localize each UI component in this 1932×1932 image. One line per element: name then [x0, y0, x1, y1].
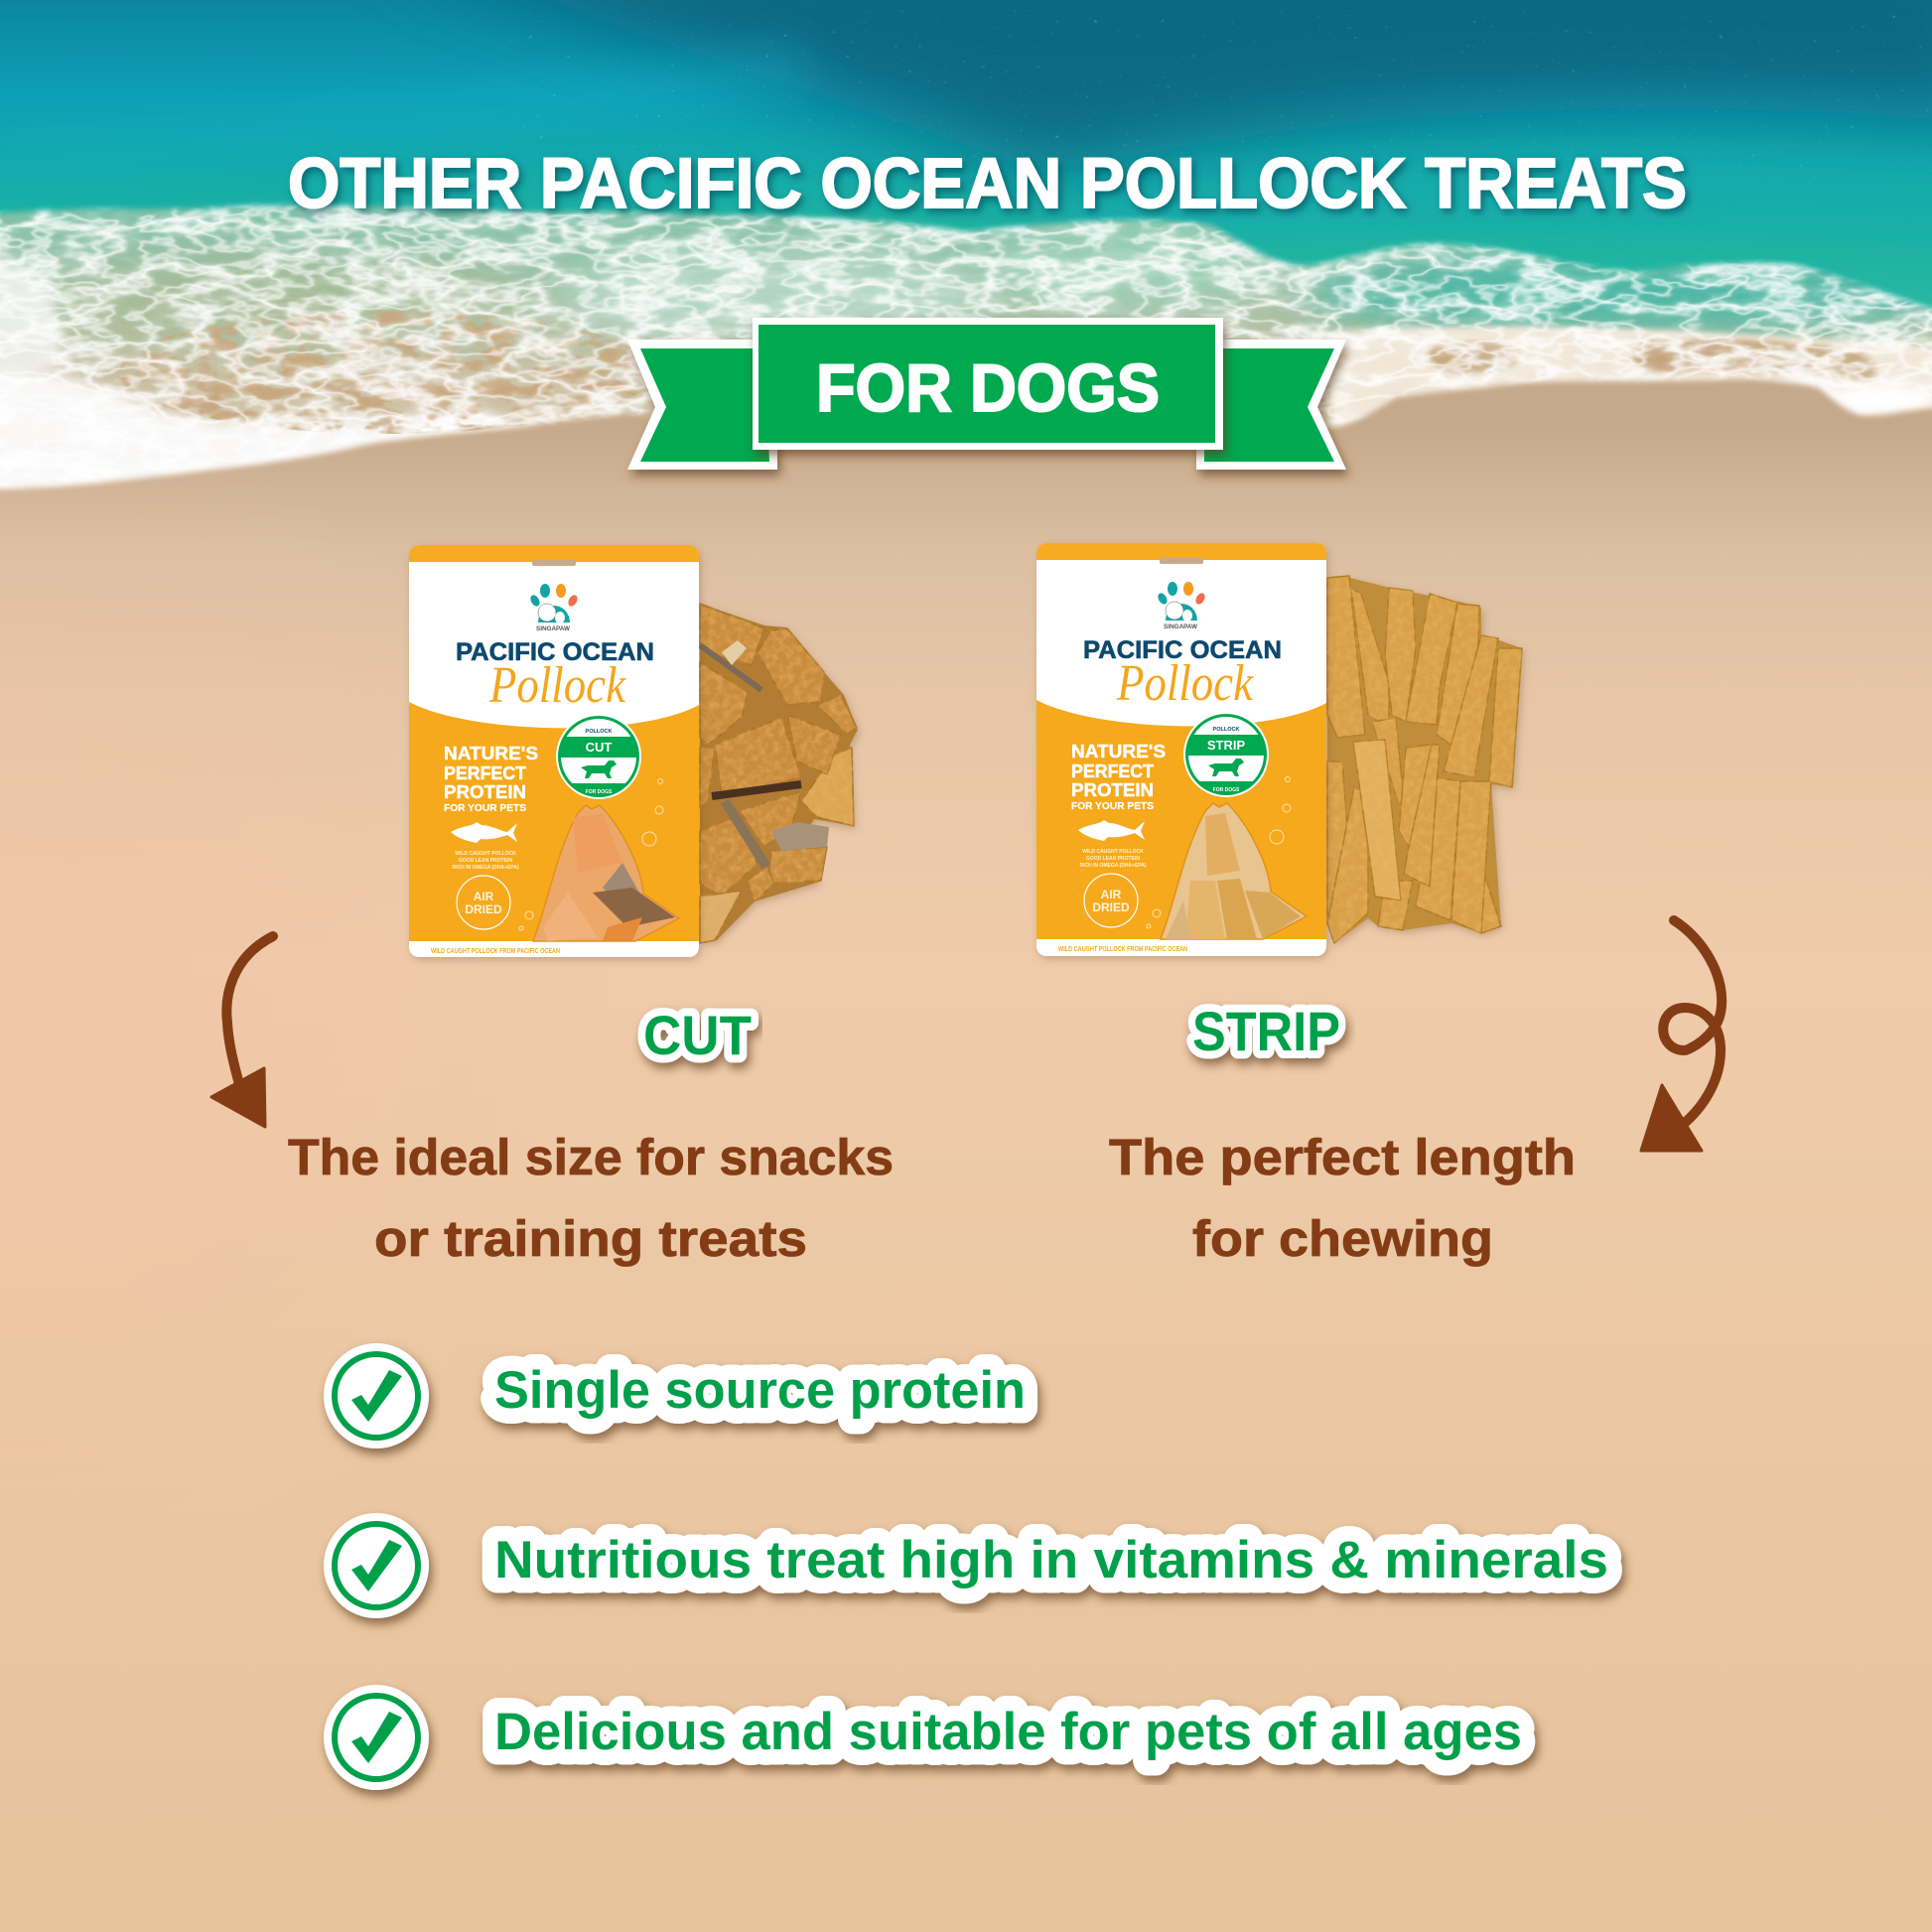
product pouch: strip: [1036, 543, 1326, 956]
description: strip: The perfect length: [1109, 1129, 1576, 1185]
ribbon centre panel: [753, 318, 1223, 450]
ribbon right tail: [1196, 340, 1346, 470]
product badge: strip: STRIP: [1207, 738, 1245, 753]
pouch footer: WILD CAUGHT POLLOCK FROM PACIFIC OCEAN: [431, 948, 560, 955]
ribbon banner: for dogs: [627, 318, 1346, 470]
fish icon: [1078, 820, 1145, 841]
product badge: cut: POLLOCK: [586, 729, 612, 735]
air dried stamp: [457, 876, 510, 929]
pouch claim: PERFECT: [1071, 761, 1154, 781]
bubbles: [519, 778, 663, 930]
pouch benefits: RICH IN OMEGA (DHA+EPA): [1079, 863, 1147, 869]
description: strip: for chewing: [1192, 1210, 1493, 1267]
pouch name: PACIFIC OCEAN: [456, 638, 654, 666]
description: strip: [1109, 1129, 1576, 1267]
product badge: strip: [1183, 712, 1269, 797]
air dried stamp: AIR: [1101, 888, 1122, 901]
fish window with treats: [1161, 803, 1307, 939]
fish icon: [451, 822, 517, 843]
arrow: looped, to strip description: [1641, 920, 1722, 1151]
pouch footer: WILD CAUGHT POLLOCK FROM PACIFIC OCEAN: [1058, 946, 1187, 953]
pouch script word: Pollock: [1116, 655, 1254, 712]
description: cut: The ideal size for snacks: [288, 1129, 894, 1185]
ribbon left tail: [627, 340, 777, 470]
air dried stamp: DRIED: [1092, 900, 1130, 914]
description: cut: [288, 1129, 894, 1267]
ribbon label: FOR DOGS: [816, 350, 1160, 426]
air dried stamp: AIR: [474, 890, 494, 903]
arrow: curved, to cut description: [211, 936, 273, 1127]
product badge: cut: [556, 714, 641, 799]
pouch claim: NATURE'S: [444, 744, 538, 763]
brand logo: SINGAPAW: [1164, 624, 1197, 630]
air dried stamp: DRIED: [465, 902, 502, 916]
pouch benefits: WILD CAUGHT POLLOCK: [1082, 849, 1144, 855]
product badge: strip: POLLOCK: [1213, 727, 1239, 733]
product badge: cut: FOR DOGS: [586, 789, 613, 795]
pouch benefits: [452, 851, 519, 871]
pouch claim: PROTEIN: [444, 782, 526, 802]
title: OTHER PACIFIC OCEAN POLLOCK TREATS: [288, 145, 1687, 223]
benefit text: Nutritious treat high in vitamins & minerals: [494, 1531, 1608, 1589]
label: strip: STRIP: [1192, 1000, 1340, 1062]
pouch claim: FOR YOUR PETS: [444, 803, 526, 814]
treat pile: cut pieces: [700, 604, 858, 943]
icon: check badge: [324, 1685, 429, 1790]
pouch claim: PROTEIN: [1071, 780, 1154, 800]
benefit text: Single source protein: [494, 1361, 1026, 1420]
benefit 1: single source protein: [324, 1343, 1026, 1449]
brand logo: [529, 584, 579, 632]
pouch claim: NATURE'S: [1071, 742, 1166, 761]
brand logo: [1157, 582, 1206, 630]
product badge: cut: CUT: [586, 740, 612, 755]
pouch script word: Pollock: [488, 657, 626, 714]
pouch benefits: GOOD LEAN PROTEIN: [459, 858, 512, 864]
icon: check badge: [324, 1343, 429, 1449]
fish window with treats: [533, 805, 679, 941]
pouch claim: [444, 744, 538, 814]
product pouch: cut: [409, 545, 699, 957]
benefit text: Delicious and suitable for pets of all ages: [494, 1703, 1522, 1761]
pouch name: PACIFIC OCEAN: [1083, 636, 1282, 664]
label: cut: CUT: [643, 1004, 752, 1066]
pouch claim: PERFECT: [444, 763, 526, 783]
icon: check badge: [324, 1513, 429, 1618]
pouch benefits: [1079, 849, 1147, 869]
benefit 3: delicious for all ages: [324, 1685, 1522, 1790]
pouch benefits: GOOD LEAN PROTEIN: [1086, 856, 1140, 862]
bubbles: [1147, 776, 1291, 928]
pouch claim: FOR YOUR PETS: [1071, 801, 1154, 812]
benefit 2: nutritious treat: [324, 1513, 1608, 1618]
air dried stamp: [1084, 874, 1138, 927]
description: cut: or training treats: [374, 1210, 807, 1267]
product badge: strip: FOR DOGS: [1213, 787, 1240, 793]
treat pile: strip pieces: [1327, 576, 1522, 943]
brand logo: SINGAPAW: [536, 626, 570, 632]
pouch benefits: WILD CAUGHT POLLOCK: [455, 851, 516, 857]
pouch benefits: RICH IN OMEGA (DHA+EPA): [452, 865, 519, 871]
pouch claim: [1071, 742, 1166, 812]
background: beach and ocean: [0, 0, 1932, 1283]
